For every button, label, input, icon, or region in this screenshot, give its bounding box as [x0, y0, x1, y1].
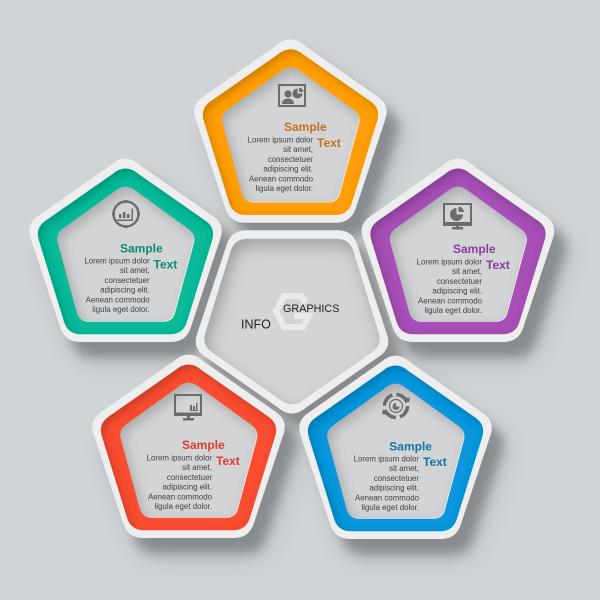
heading: Sample Text: Sample [453, 242, 496, 256]
text block: adipiscing elit. [100, 286, 150, 295]
text block: ligula eget dolor. [362, 503, 419, 512]
text block [354, 454, 420, 512]
text block: adipiscing elit. [162, 482, 212, 492]
text block: consectetuer [437, 277, 482, 286]
text block: ligula eget dolor. [155, 502, 212, 511]
icon: hexagon G logo [276, 296, 309, 327]
text block [147, 453, 213, 511]
text block: Aenean commodo [418, 296, 483, 305]
text block: Aenean commodo [148, 492, 213, 501]
panel: orange pentagon [194, 39, 387, 223]
icon: gauge chart circle [112, 200, 140, 228]
icon: circular arrows [382, 394, 410, 418]
heading: Sample Text: Text [486, 258, 510, 272]
text block: Lorem ipsum dolor [354, 454, 419, 463]
text block: consectetuer [374, 474, 419, 483]
text block: sit amet, [120, 266, 150, 275]
text block [417, 257, 483, 315]
panel: center pentagon [196, 230, 388, 414]
panel: red pentagon [92, 355, 285, 538]
center label: INFO: INFO [241, 318, 271, 332]
heading: Sample Text: Text [423, 455, 447, 469]
icon: presentation frame [278, 84, 306, 107]
heading: Sample Text [389, 440, 447, 469]
heading: Sample Text [284, 120, 341, 150]
text block: Lorem ipsum dolor [147, 453, 212, 462]
text block [84, 256, 150, 314]
panel: teal pentagon [29, 159, 222, 342]
panel: blue pentagon [299, 356, 492, 539]
text block: sit amet, [182, 463, 212, 472]
text block: adipiscing elit. [432, 286, 482, 296]
icon: monitor with pie chart [443, 203, 472, 230]
heading: Sample Text: Sample [284, 120, 327, 134]
text block: Lorem ipsum dolor [248, 135, 313, 144]
text block: sit amet, [389, 464, 419, 473]
text block: Aenean commodo [86, 296, 150, 304]
heading: Sample Text [120, 242, 177, 272]
text block: consectetuer [167, 473, 212, 482]
text block: ligula eget dolor. [425, 306, 482, 315]
icon: monitor with bar chart [174, 394, 202, 420]
text block: ligula eget dolor. [92, 305, 150, 314]
heading: Sample Text: Text [216, 454, 240, 468]
text block: ligula eget dolor. [256, 184, 313, 193]
text block: consectetuer [268, 155, 313, 164]
heading: Sample Text: Text [317, 136, 341, 150]
text block [248, 135, 314, 193]
text block: Lorem ipsum dolor [84, 256, 150, 266]
heading: Sample Text: Text [154, 258, 177, 272]
text block: Aenean commodo [249, 174, 314, 183]
drop shadows [41, 54, 568, 559]
text block: Aenean commodo [355, 493, 420, 502]
heading: Sample Text: Sample [120, 242, 163, 256]
heading: Sample Text [182, 438, 240, 468]
text block: Lorem ipsum dolor [417, 257, 482, 266]
text block: sit amet, [283, 145, 313, 154]
heading: Sample Text: Sample [389, 440, 432, 454]
heading: Sample Text: Sample [182, 438, 225, 452]
text block: adipiscing elit. [263, 164, 313, 174]
text block: consectetuer [105, 276, 150, 285]
text block: adipiscing elit. [369, 484, 419, 492]
center label: GRAPHICS: GRAPHICS [283, 303, 339, 315]
heading: Sample Text [453, 242, 510, 272]
text block: sit amet, [452, 267, 482, 276]
panel: purple pentagon [362, 159, 554, 342]
